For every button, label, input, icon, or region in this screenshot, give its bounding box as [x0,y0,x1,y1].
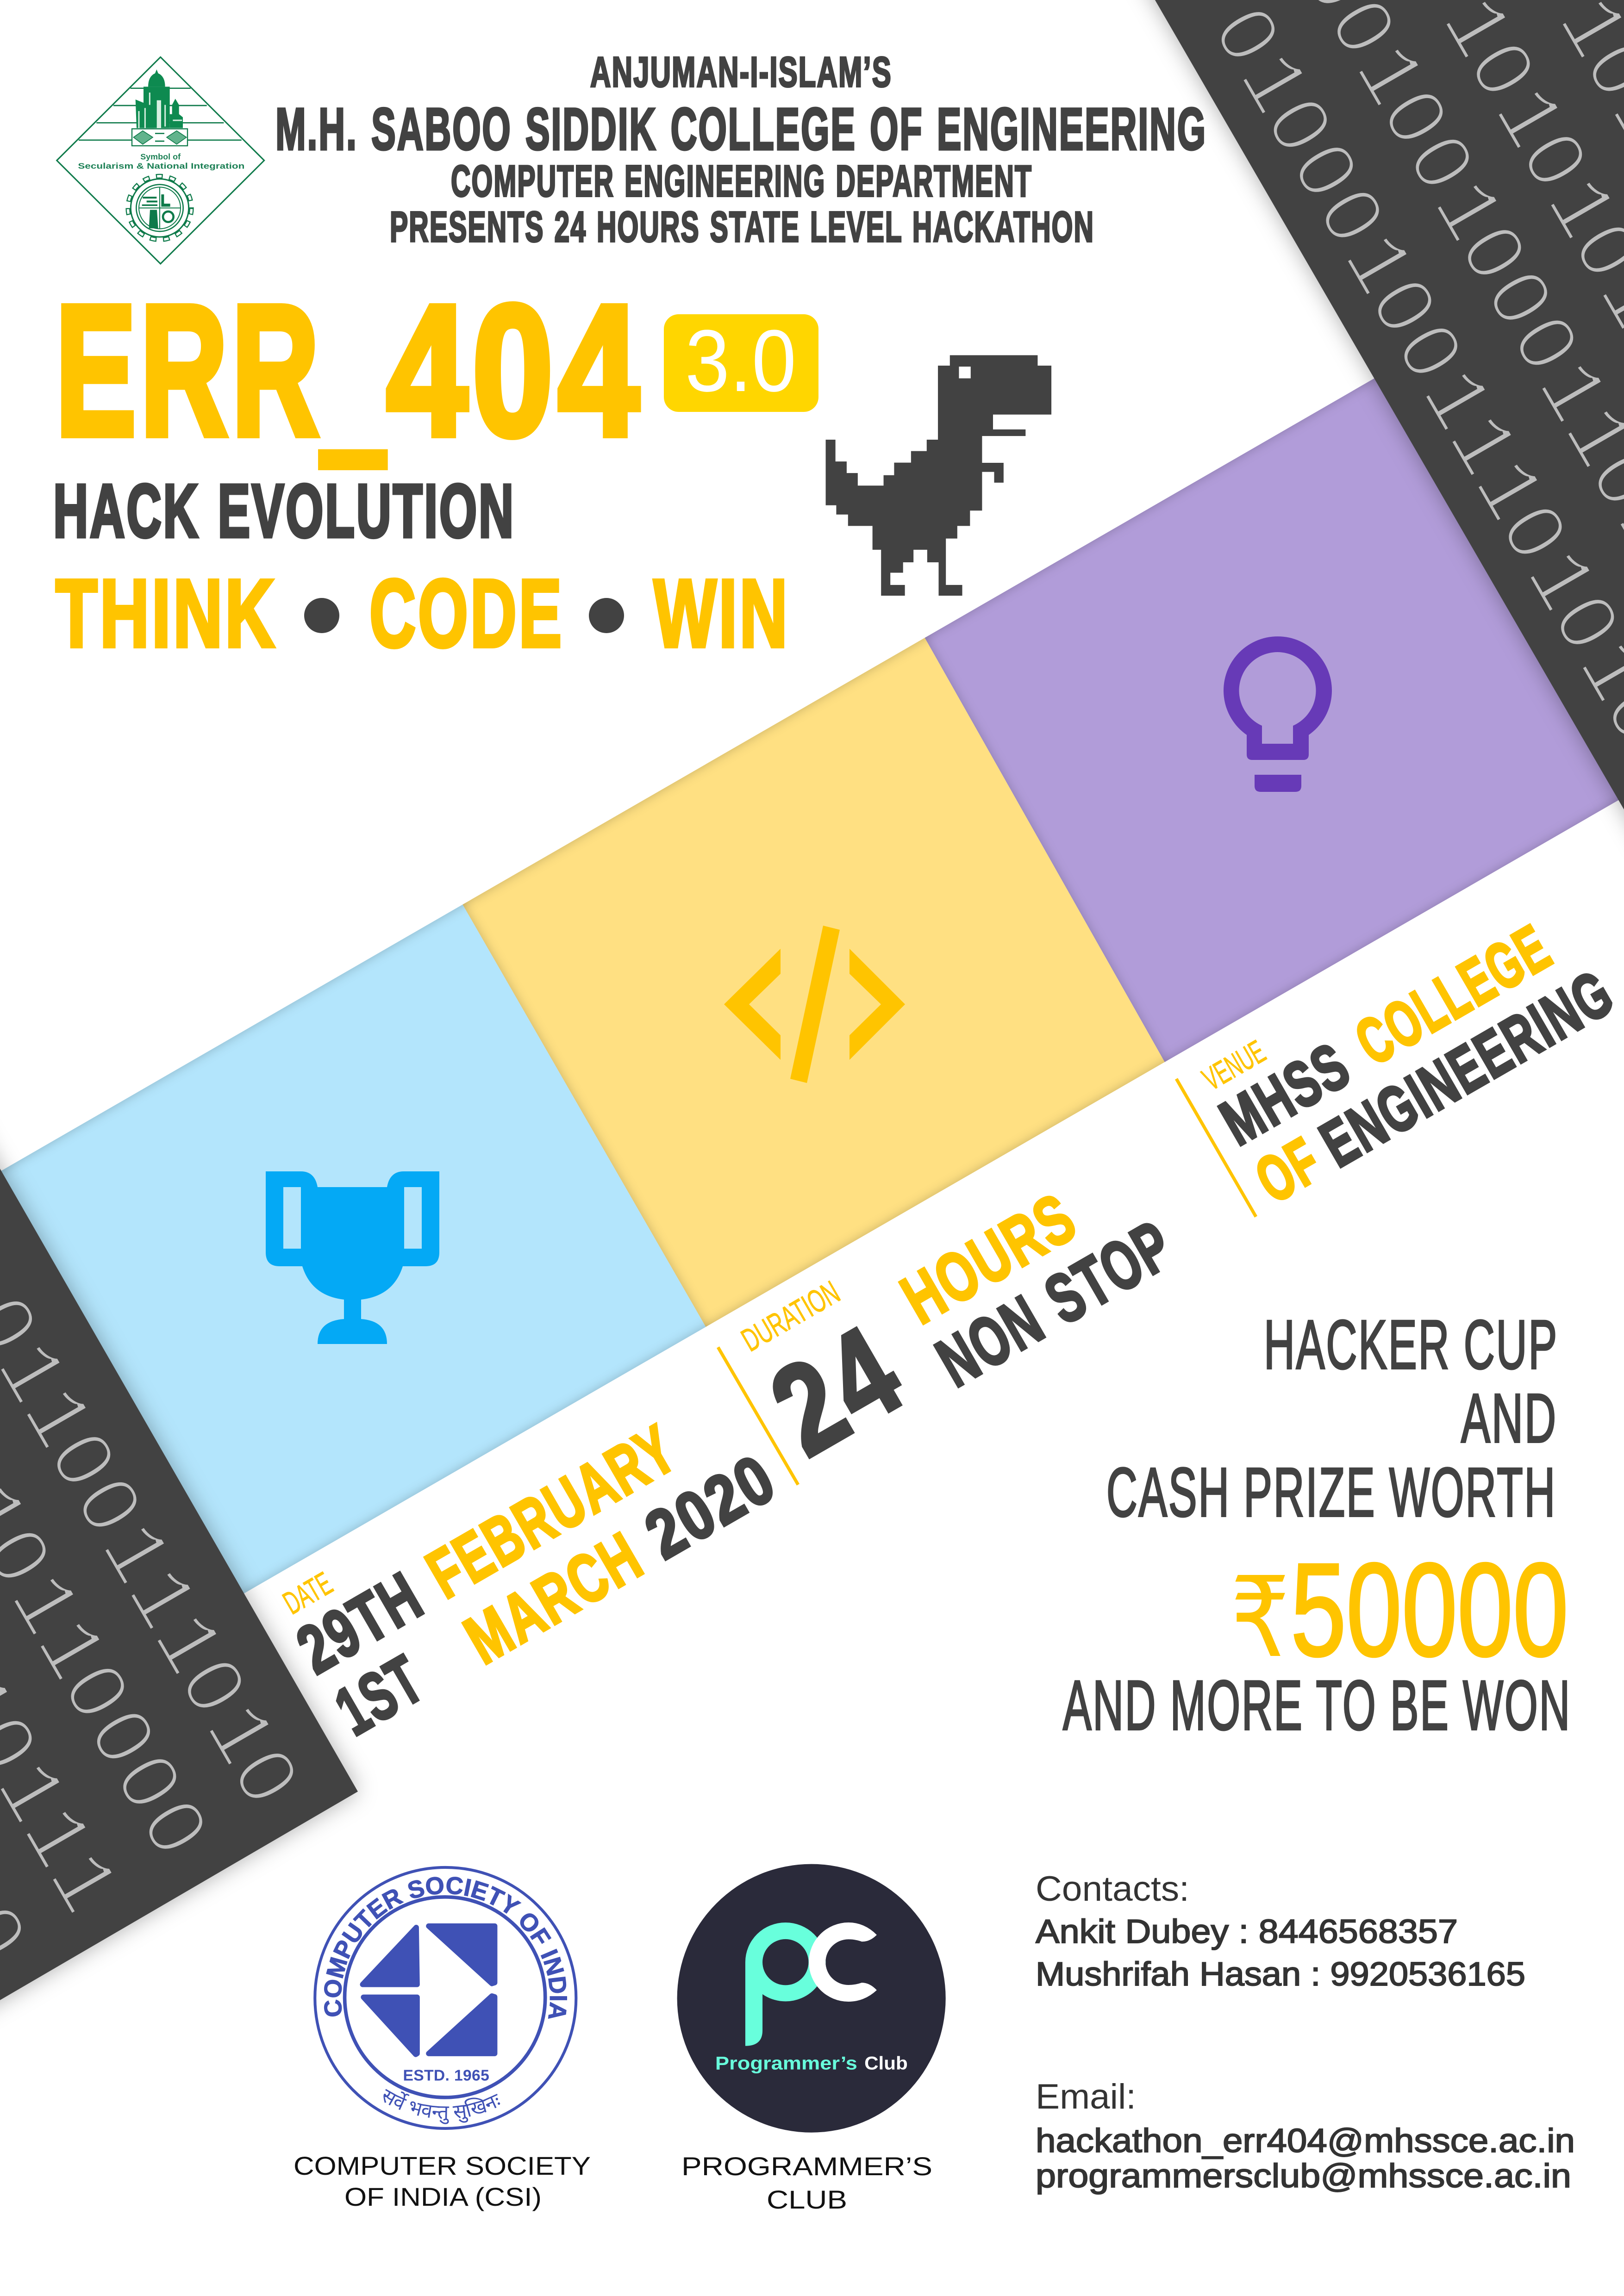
text: 29th: 29TH [285,1557,435,1688]
text: march: MARCH [453,1518,655,1679]
tagline: think code win: WIN [654,560,790,667]
icon: CSI logo: ESTD. 1965 [403,2067,489,2084]
panel: duration details [735,1178,1186,1482]
text: presents line: PRESENTS 24 HOURS STATE LEVEL HACKATHON [390,203,1094,251]
panel: blue win square [0,867,729,1689]
label: venue: VENUE [1196,1033,1271,1097]
text block: contacts: Contacts: [1036,1869,1189,1909]
caption: computer society of india [294,2151,591,2211]
text: Anjuman-I-Islam's: ANJUMAN-I-ISLAM’S [590,49,892,96]
panel: date details [277,1410,788,1750]
text: logo motto: Secularism & National Integration [78,162,244,171]
panel: venue details [1196,910,1624,1217]
icon: code brackets [724,926,905,1083]
text: 24: 24 [749,1298,926,1482]
icon: Programmer's Club logo: Programmer’s [715,2053,857,2074]
icon: CSI logo [315,1867,576,2128]
icon: lightbulb [1224,636,1332,792]
text: logo motto [78,152,244,171]
text: and: AND [1461,1379,1557,1457]
text block: email [1036,2077,1575,2195]
badge: version 3.0: 3.0 [685,312,796,410]
title: ERR_404: 404 [387,267,644,474]
icon: CSI logo: COMPUTER SOCIETY OF INDIA [319,1872,572,2022]
subtitle: hack evolution: HACK EVOLUTION [53,468,515,553]
text: department: COMPUTER ENGINEERING DEPARTMENT [451,156,1032,206]
text: mhss: MHSS [1208,1028,1362,1159]
title: ERR_404: _ [321,273,385,480]
icon: college diamond logo [57,57,264,264]
title: ERR_404: ERR [56,267,323,474]
text: non stop: NON STOP [924,1205,1186,1401]
icon: trophy [266,1171,439,1344]
caption: computer society of india: COMPUTER SOCIETY [294,2151,591,2180]
text: hours: HOURS [889,1178,1089,1338]
panel: diagonal band of coloured squares [0,231,1624,1689]
text: prize amount: ₹ [1230,1556,1290,1680]
text block: contacts: Ankit Dubey : 8446568357 [1036,1913,1458,1950]
icon: Programmer's Club logo: Club [864,2053,908,2074]
icon: pixel dinosaur [826,355,1051,596]
tagline: think code win: CODE [369,560,564,667]
icon: Programmer's Club logo [677,1864,946,2133]
label: date: DATE [277,1565,338,1621]
panel: purple idea square [903,231,1624,1101]
title: ERR_404 [56,267,644,480]
text: logo motto: Symbol of [140,152,181,161]
text: february: FEBRUARY [415,1410,689,1613]
heading: college header block [275,49,1207,251]
tagline: think code win: THINK [56,560,277,667]
caption: programmer's club [681,2152,932,2214]
text: of: OF [1243,1123,1333,1217]
tagline: think code win [56,560,790,667]
text: 1st: 1ST [323,1641,436,1750]
caption: programmer's club: PROGRAMMER’S [681,2152,932,2181]
text block: email: Email: [1036,2077,1136,2116]
text: 2020: 2020 [633,1440,788,1574]
panel: prize text [1063,1306,1571,1745]
text block: email: hackathon_err404@mhssce.ac.in [1036,2122,1575,2159]
caption: programmer's club: CLUB [767,2185,847,2214]
label: duration: DURATION [735,1274,846,1358]
icon: CSI logo: सर्वे भवन्तु सुखिनः [378,2084,504,2124]
text block: contacts [1036,1869,1525,1993]
panel: yellow code square [441,599,1187,1367]
panel: bottom left binary strip [0,1088,358,2027]
text block: email: programmersclub@mhssce.ac.in [1036,2158,1571,2195]
caption: computer society of india: OF INDIA (CSI) [344,2182,542,2211]
text block: contacts: Mushrifah Hasan : 9920536165 [1036,1956,1525,1993]
